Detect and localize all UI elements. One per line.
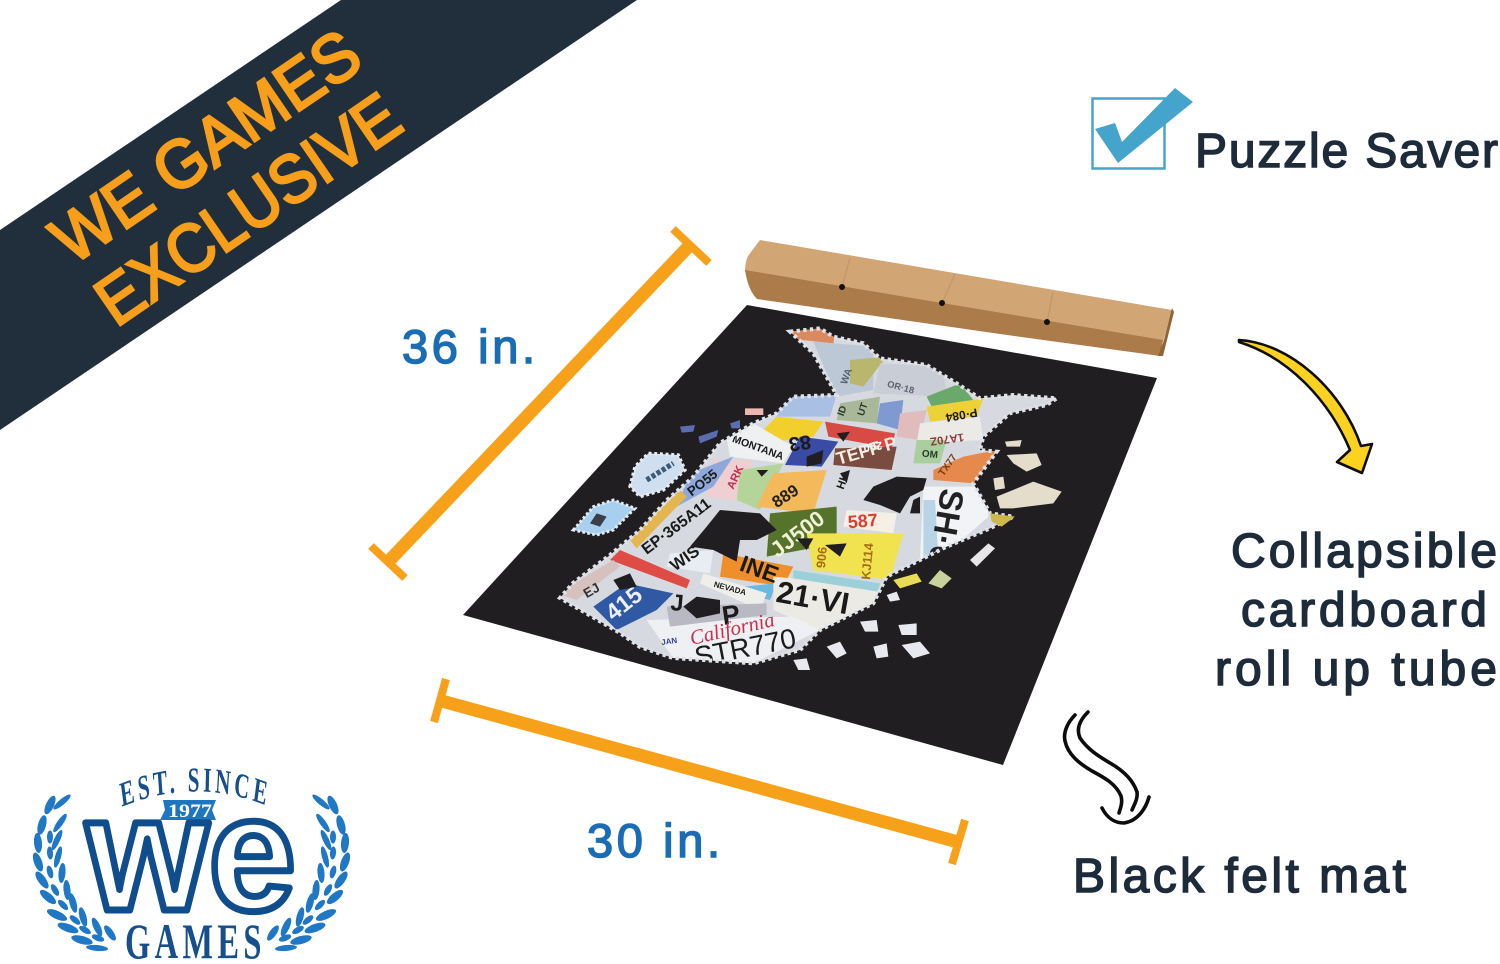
puzzle map in progress <box>557 326 1062 670</box>
plate lettering: OM <box>921 449 938 461</box>
plate lettering: J <box>670 589 685 616</box>
plate lettering: 415 <box>600 581 647 626</box>
plate lettering <box>581 367 979 673</box>
left laurel <box>31 793 118 952</box>
plate lettering: MONTANA <box>731 433 785 463</box>
plate lettering: STR770 <box>692 623 799 673</box>
plate lettering: INE <box>737 550 782 588</box>
plate lettering: 906 <box>814 546 830 569</box>
banner: WE Games Exclusive <box>0 0 637 430</box>
plate lettering: NEVADA <box>713 580 747 597</box>
est since arc: EST. SINCE <box>119 768 267 807</box>
plate lettering: WIS <box>666 541 703 575</box>
plate lettering: 83 <box>787 430 812 455</box>
plate lettering: ARK <box>725 463 747 491</box>
central plates <box>557 417 988 663</box>
1977 ribbon: 1977 <box>168 801 213 822</box>
label: Collapsible cardboard roll up tube: cardboard <box>1241 584 1487 637</box>
banner: WE Games Exclusive: WE GAMES <box>38 15 375 278</box>
black felt mat <box>463 305 1157 765</box>
dimension label: 30 in.: 30 in. <box>587 814 720 867</box>
plate lettering: 889 <box>768 481 802 512</box>
plate lettering: ID <box>836 405 850 418</box>
dimension bar: 36 in. <box>371 229 709 578</box>
plate lettering: 587 <box>847 510 879 532</box>
plate lettering: 21·VI <box>774 575 852 621</box>
icon: checkbox with check mark <box>1092 88 1193 168</box>
plate lettering: JJ500 <box>765 506 829 562</box>
plate lettering: HH <box>835 472 852 491</box>
jigsaw edge of the map <box>560 328 1057 663</box>
plate lettering: KJ114 <box>859 543 876 580</box>
plate lettering: SH·6 <box>921 486 970 567</box>
plate lettering: P <box>720 599 742 631</box>
label: Black felt mat: Black felt mat <box>1073 850 1406 903</box>
plate lettering: 1A70Z <box>929 430 965 447</box>
plate lettering: 200 <box>863 439 883 453</box>
plate lettering: JAN <box>661 636 678 647</box>
logo: WE Games <box>32 761 350 964</box>
right laurel <box>265 793 352 952</box>
plate lettering: P·084 <box>944 405 979 425</box>
plate lettering: TX77 <box>937 452 960 478</box>
arrow: curved yellow arrow to tube <box>1239 340 1372 473</box>
plate lettering: WA <box>839 367 855 386</box>
heading: Puzzle Saver: Puzzle Saver <box>1195 125 1498 178</box>
photo: cardboard roll up tube <box>745 240 1174 356</box>
label: Collapsible cardboard roll up tube: Collapsible <box>1231 525 1497 578</box>
1977 ribbon <box>160 800 216 822</box>
label: Collapsible cardboard roll up tube <box>1215 525 1497 696</box>
plate lettering: UT <box>856 401 871 418</box>
plate lettering: TEFF P <box>834 433 899 469</box>
gaps in the puzzle <box>613 432 927 618</box>
plate lettering: California <box>688 609 777 650</box>
north region plates <box>777 327 997 483</box>
dimension label: 36 in.: 36 in. <box>402 320 535 373</box>
plate lettering: EJ <box>581 580 602 601</box>
banner: WE Games Exclusive: EXCLUSIVE <box>81 78 415 340</box>
WE wordmark: we <box>85 761 296 945</box>
plate lettering: EP·365A11 <box>639 495 714 558</box>
dimension bar: 30 in. <box>434 679 965 864</box>
loose puzzle pieces <box>573 408 1062 670</box>
plate lettering: OR·18 <box>886 379 915 396</box>
label: Collapsible cardboard roll up tube: roll up tube <box>1215 643 1497 696</box>
plate lettering: PO55 <box>684 466 721 499</box>
arrow: squiggle to felt mat <box>1065 712 1149 823</box>
